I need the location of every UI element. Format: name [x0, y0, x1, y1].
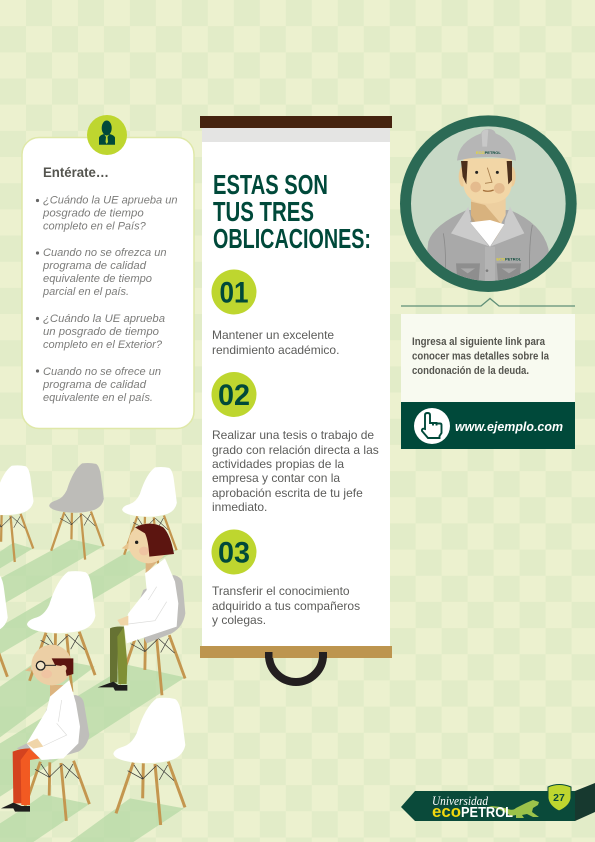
portrait: worker in circle: ECOPETROL — [476, 150, 501, 155]
step 01: Mantener un excelente — [212, 328, 334, 342]
bullet list: Cuando no se ofrece un — [43, 366, 161, 378]
step 03 — [212, 530, 360, 627]
title: OBLICACIONES: — [213, 223, 371, 254]
bullet list: equivalente de tiempo — [43, 273, 152, 285]
portrait: worker in circle: ECOPETROL — [496, 256, 522, 261]
bullet list: equivalente en el país. — [43, 392, 153, 404]
callout text: condonación de la deuda. — [412, 365, 529, 377]
icon: person badge — [87, 115, 127, 155]
bullet list — [36, 194, 178, 404]
step 01: rendimiento académico. — [212, 343, 339, 357]
icon: pointing hand — [414, 408, 450, 444]
bullet list: Cuando no se ofrezca un — [43, 247, 166, 259]
hook overlap — [265, 652, 327, 658]
step 01 — [212, 270, 339, 357]
step 02: Realizar una tesis o trabajo de — [212, 428, 374, 442]
step 02: actividades propias de la — [212, 457, 344, 471]
callout text: conocer mas detalles sobre la — [412, 350, 550, 362]
bullet list: ¿Cuándo la UE aprueba — [43, 313, 165, 325]
title — [213, 169, 371, 254]
step 02: empresa y contar con la — [212, 471, 340, 485]
step 03: 03 — [218, 536, 250, 570]
page number shield — [548, 784, 571, 811]
step 02: inmediato. — [212, 500, 267, 514]
footer: Universidad Ecopetrol ribbon — [401, 783, 595, 821]
step 02 — [212, 372, 379, 514]
illustration: people seated on chairs — [0, 463, 185, 842]
step 02: grado con relación directa a las — [212, 443, 379, 457]
banner hook — [269, 655, 323, 682]
bullet list: posgrado de tiempo — [42, 208, 144, 220]
callout text — [412, 336, 550, 377]
chair: middle left edge — [0, 573, 8, 694]
man seated with glasses — [1, 645, 89, 821]
woman seated — [98, 523, 185, 695]
panel: link callout — [401, 314, 575, 449]
link bar: www.ejemplo.com — [455, 419, 563, 434]
bullet list: parcial en el país. — [42, 286, 129, 298]
chair: top left — [0, 465, 34, 562]
footer: Universidad Ecopetrol ribbon: PETROL — [461, 804, 513, 821]
heading: Entérate: Entérate… — [43, 164, 109, 180]
panel: hanging banner — [200, 116, 392, 682]
portrait: worker in circle — [400, 115, 577, 292]
title: ESTAS SON — [213, 169, 328, 200]
icon: iguana — [488, 800, 539, 818]
footer: Universidad Ecopetrol ribbon: Universidad — [432, 794, 489, 808]
bullet list: programa de calidad — [42, 260, 147, 272]
step 01: 01 — [220, 276, 248, 310]
panel: Entérate — [22, 115, 194, 428]
step 02: aprobación escrita de tu jefe — [212, 486, 363, 500]
footer: Universidad Ecopetrol ribbon: eco — [432, 802, 461, 821]
chair: top right — [122, 467, 177, 564]
chair: middle — [27, 571, 95, 692]
title: TUS TRES — [213, 196, 314, 227]
link bar — [401, 402, 575, 449]
callout text: Ingresa al siguiente link para — [412, 336, 546, 348]
page number shield: 27 — [553, 792, 565, 804]
step 03: Transferir el conocimiento — [212, 584, 350, 598]
bullet list: programa de calidad — [42, 379, 147, 391]
bullet list: completo en el Exterior? — [43, 339, 163, 351]
divider with notch — [401, 298, 575, 306]
floor shadows — [0, 539, 185, 842]
chair: top grey — [49, 463, 104, 560]
bullet list: ¿Cuándo la UE aprueba un — [43, 194, 178, 206]
step 03: y colegas. — [212, 613, 266, 627]
step 03: adquirido a tus compañeros — [212, 599, 360, 613]
bullet list: un posgrado de tiempo — [43, 326, 159, 338]
step 02: 02 — [218, 379, 250, 412]
chair: bottom right — [113, 698, 185, 825]
bullet list: completo en el País? — [43, 220, 146, 232]
